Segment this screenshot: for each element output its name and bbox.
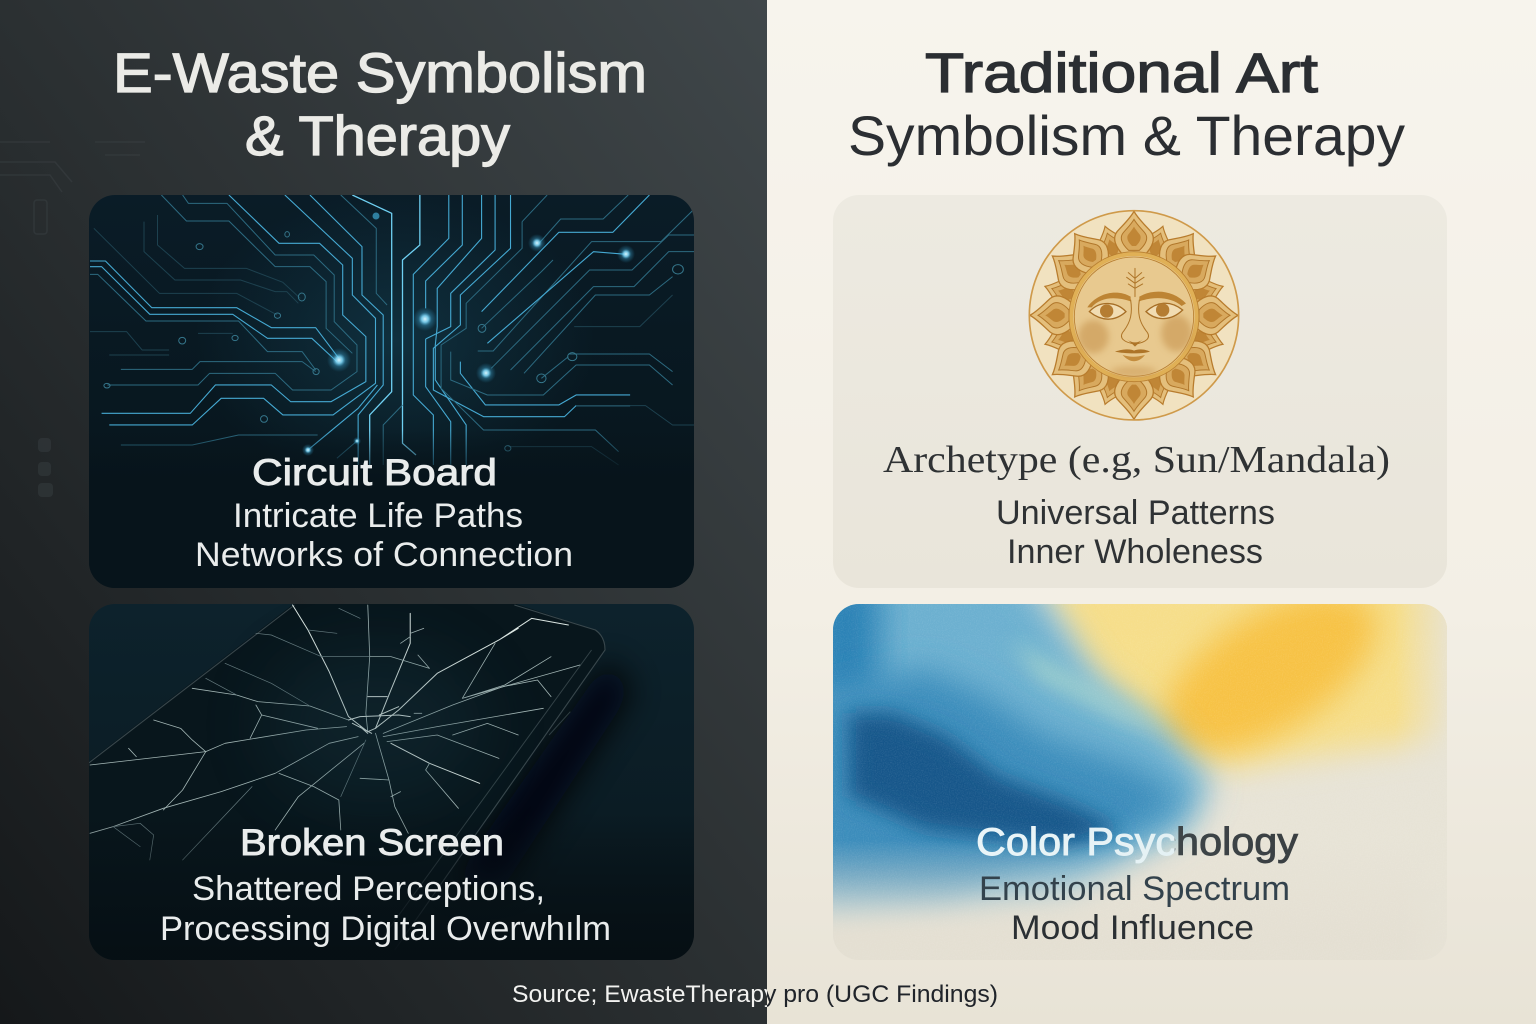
icon: sun mandala with face bbox=[1029, 211, 1239, 420]
heading: traditional art symbolism and therapy bbox=[848, 41, 1405, 167]
illustration: circuit traces bbox=[90, 195, 695, 465]
glowing nodes bbox=[302, 212, 635, 456]
text: circuit board bbox=[195, 452, 573, 574]
panel: broken screen card bbox=[82, 603, 694, 967]
text: archetype: Archetype (e.g, Sun/Mandala) bbox=[883, 439, 1390, 481]
text: archetype bbox=[883, 439, 1390, 571]
illustration: phone with shattered glass bbox=[89, 604, 606, 932]
heading: traditional art symbolism and therapy: Traditional Art bbox=[925, 41, 1318, 104]
panel: traditional art side background bbox=[767, 0, 1536, 1024]
text: broken screen bbox=[160, 822, 611, 948]
heading: traditional art symbolism and therapy: Symbolism & Therapy bbox=[848, 104, 1405, 167]
text: broken screen: Broken Screen bbox=[240, 822, 504, 863]
heading: e-waste symbolism and therapy bbox=[113, 41, 647, 167]
text: color psychology: Mood Influence bbox=[1011, 909, 1254, 947]
text: archetype: Universal Patterns bbox=[996, 494, 1275, 532]
panel: circuit board card bbox=[89, 190, 695, 590]
text: circuit board: Intricate Life Paths bbox=[233, 497, 523, 535]
text: circuit board: Circuit Board bbox=[252, 452, 497, 493]
text: color psychology bbox=[976, 821, 1299, 947]
panel: color psychology card bbox=[833, 604, 1447, 940]
text: color psychology: Emotional Spectrum bbox=[979, 870, 1290, 908]
heading: e-waste symbolism and therapy: E-Waste Symbolism bbox=[113, 41, 647, 104]
phone shadow bbox=[450, 660, 632, 885]
faint circuit pattern on left background bbox=[0, 142, 145, 497]
text: color psychology: Color Psychology bbox=[976, 821, 1299, 864]
source credit: Source; EwasteTherapy pro (UGC Findings) bbox=[512, 981, 998, 1008]
panel: archetype card bbox=[833, 195, 1447, 588]
sun face bbox=[1069, 252, 1199, 382]
panel: e-waste side background bbox=[0, 0, 767, 1024]
heading: e-waste symbolism and therapy: & Therapy bbox=[245, 104, 510, 167]
illustration: blue and yellow watercolor gradient bbox=[833, 604, 1447, 928]
text: broken screen: Shattered Perceptions, bbox=[192, 870, 545, 908]
text: broken screen: Processing Digital Overwhılm bbox=[160, 910, 611, 948]
text: circuit board: Networks of Connection bbox=[195, 536, 573, 574]
text: archetype: Inner Wholeness bbox=[1007, 533, 1263, 571]
